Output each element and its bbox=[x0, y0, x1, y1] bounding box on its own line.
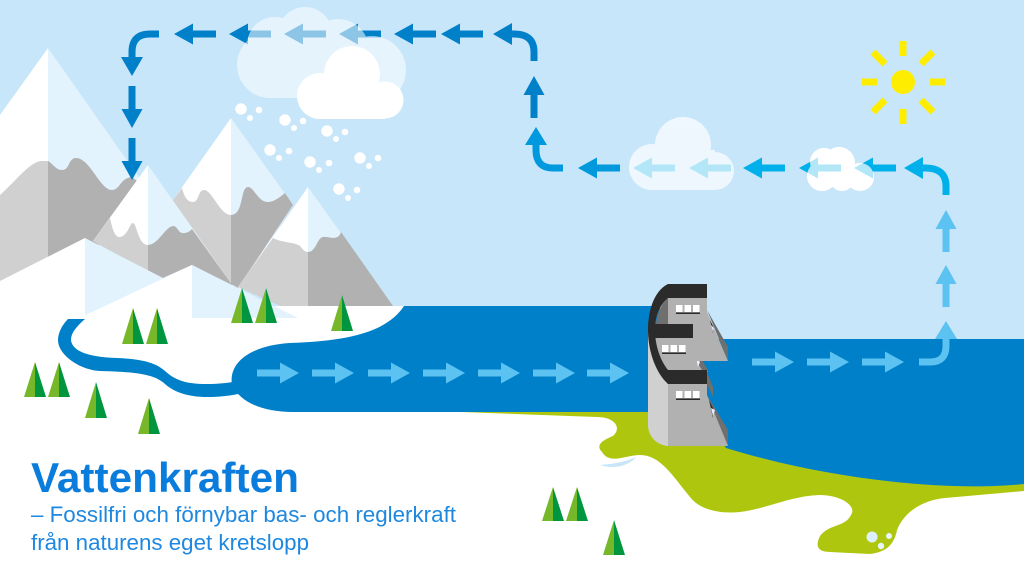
arrows: turning upward bbox=[525, 127, 620, 178]
arrows: out to sea and rising bbox=[752, 210, 957, 372]
mountain: large left peak bbox=[0, 48, 145, 300]
arrows: evaporation to the left bbox=[633, 157, 946, 195]
black roofs and arc bbox=[648, 284, 707, 384]
water bubbles bbox=[866, 532, 892, 549]
arrows: high atmosphere loop bbox=[121, 23, 544, 180]
river bbox=[58, 319, 238, 397]
hydropower dam building bbox=[648, 284, 728, 446]
ground snow bbox=[0, 306, 1024, 576]
windows bbox=[662, 305, 700, 398]
pine trees bbox=[24, 288, 625, 555]
sky background bbox=[0, 0, 1024, 345]
title: Vattenkraften bbox=[31, 454, 299, 501]
mountain: small front peak bbox=[93, 165, 233, 286]
cloud: translucent middle cloud bbox=[629, 117, 734, 190]
middle block bbox=[655, 336, 708, 372]
cloud: small white cloud overlay bbox=[807, 147, 874, 191]
mountain: fourth peak bbox=[238, 187, 393, 306]
subtitle line 2: från naturens eget kretslopp bbox=[31, 530, 309, 555]
arrows: through reservoir bbox=[257, 362, 629, 384]
snow hills bbox=[0, 238, 298, 322]
snowfall bbox=[235, 103, 381, 201]
cloud: translucent back cloud bbox=[237, 7, 406, 104]
water swoosh bbox=[600, 457, 636, 467]
top block bbox=[668, 298, 728, 361]
icon: sun bbox=[862, 41, 945, 124]
water reservoir and sea bbox=[232, 306, 1024, 486]
mountains bbox=[0, 48, 393, 306]
small white cloud base bbox=[807, 147, 874, 191]
subtitle line 1: – Fossilfri och förnybar bas- och reglerkraft bbox=[31, 502, 456, 527]
concrete left wall bbox=[648, 330, 668, 446]
green shore bbox=[460, 400, 1024, 554]
mountain: third peak bbox=[150, 118, 293, 290]
lower block bbox=[668, 384, 728, 446]
cloud: white front cloud bbox=[297, 46, 404, 119]
